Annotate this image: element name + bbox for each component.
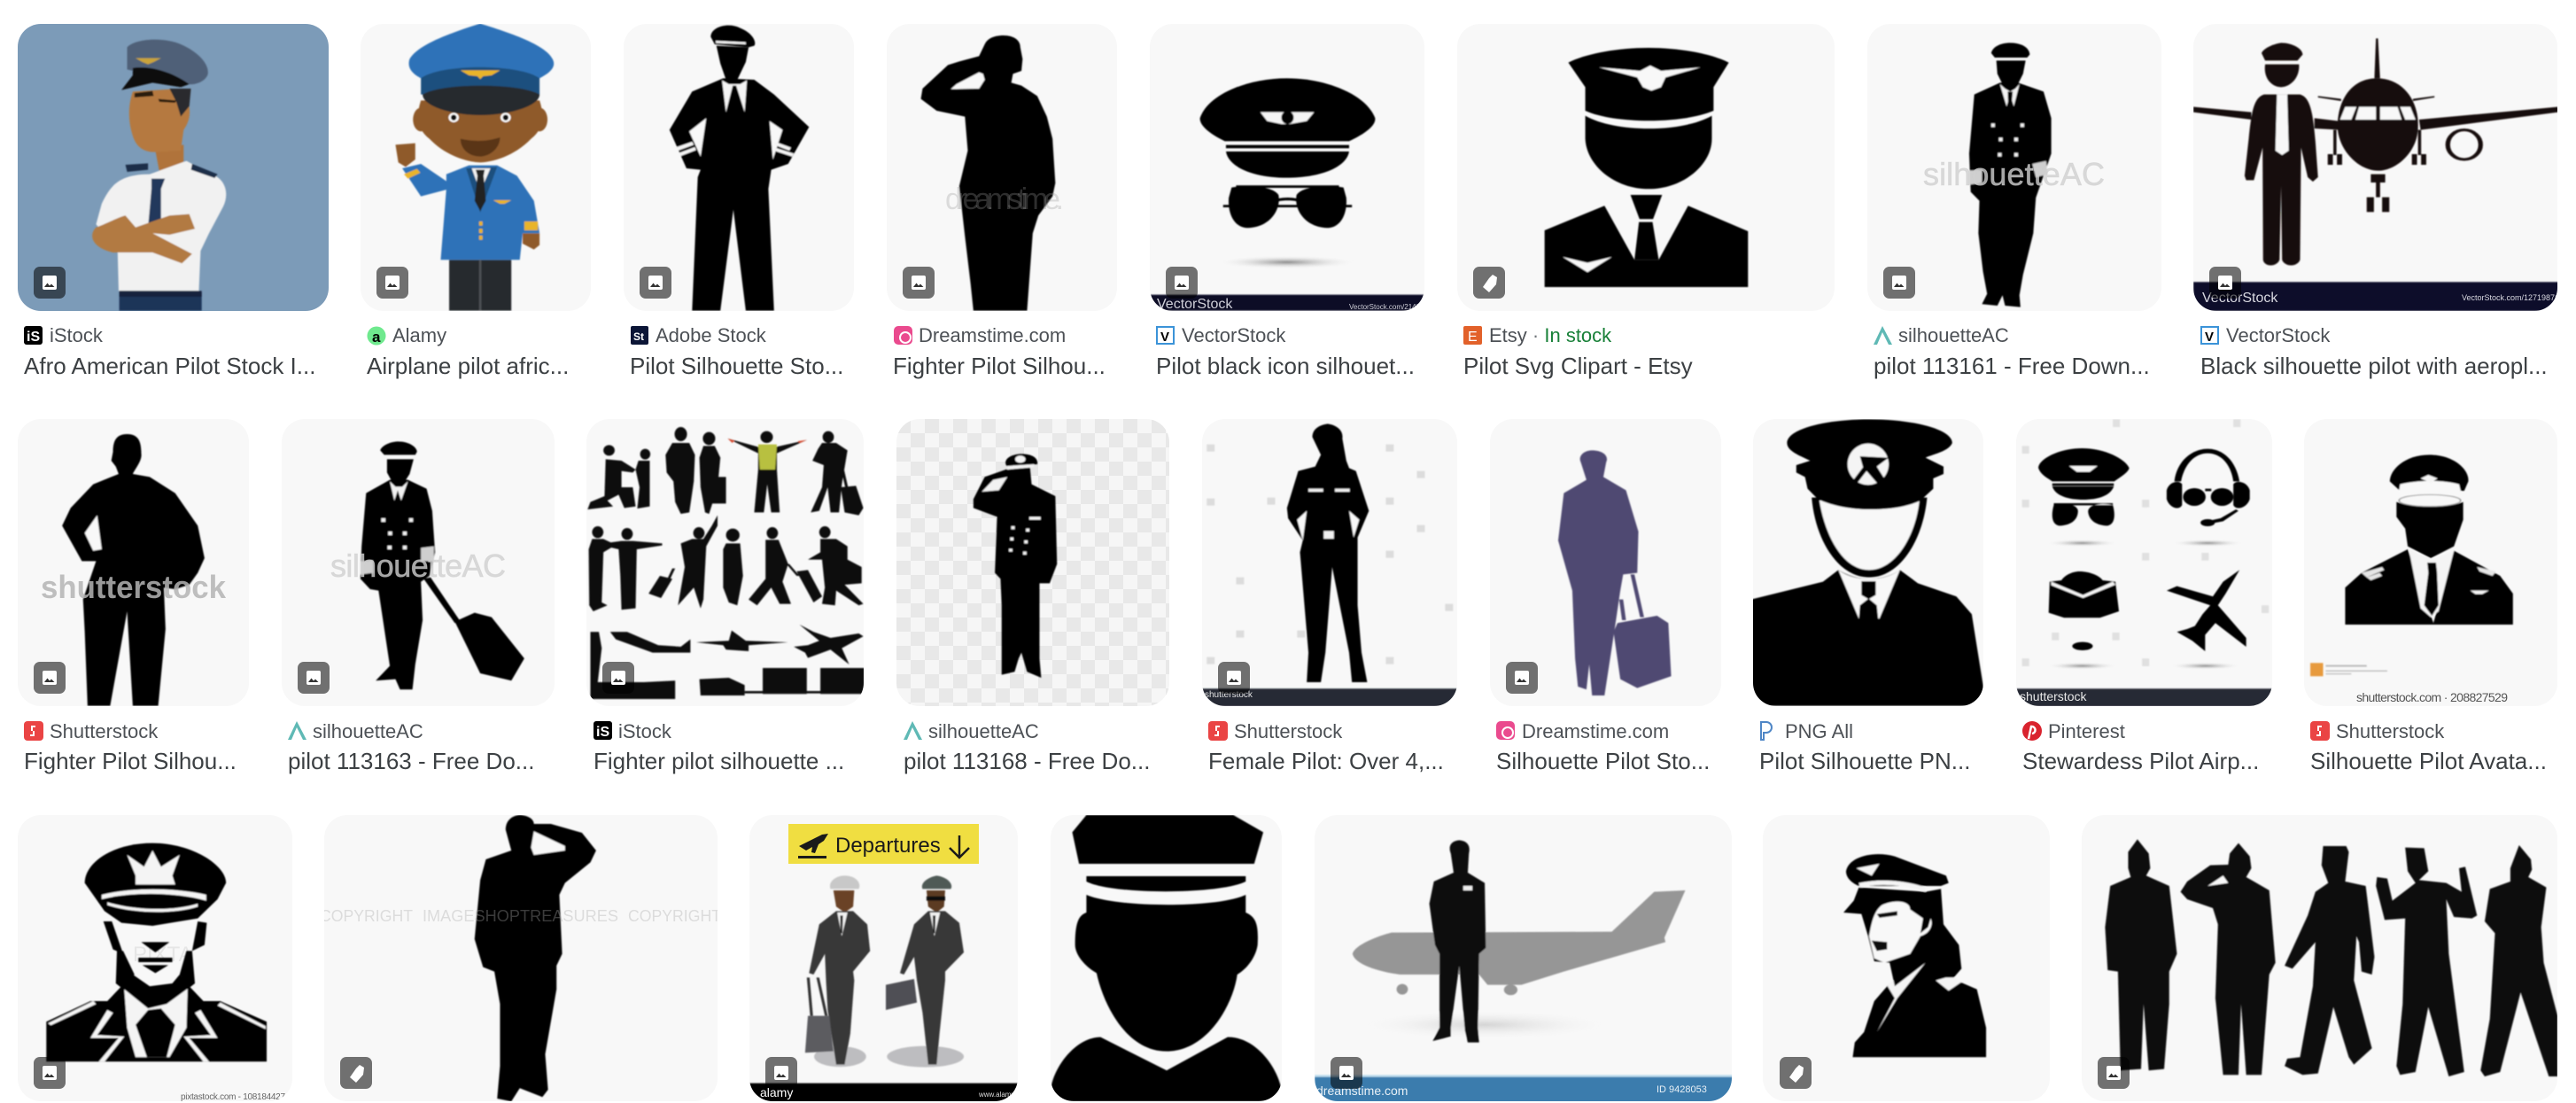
panel: result 13 Shutterstock female pilot: [1202, 419, 1459, 774]
source: Etsy, in stock: E: [1468, 330, 1478, 345]
panel: result 11 iStock silhouettes set: [586, 419, 865, 774]
watermark: silhouetteAC: [330, 548, 506, 584]
thumbnail: captain with rolling suitcase: [298, 439, 526, 694]
panel: result 15 PNG All: [1751, 419, 1983, 774]
badge: image: [602, 662, 634, 685]
badge: image: [1166, 267, 1198, 299]
panel: result 18 Pixta officer illustration: [18, 815, 292, 1102]
watermark bar text: VectorStock: [2202, 291, 2278, 306]
title: pilot 113161 - Free Down...: [1874, 353, 2150, 379]
watermark bar text: [760, 1085, 1030, 1099]
source: silhouetteAC: silhouetteAC: [313, 720, 423, 742]
left pilot with roller bag: [805, 875, 870, 1067]
panel: result 5 VectorStock cap and sunglasses: [1151, 76, 1424, 374]
panel: result 4 Dreamstime: [894, 34, 1104, 379]
source: silhouetteAC: silhouetteAC: [928, 720, 1039, 742]
source: Alamy: a: [372, 329, 381, 346]
watermark bar text: www.alamy.com: [978, 1091, 1030, 1099]
thumbnail: saluting pilot silhouette: [903, 34, 1061, 311]
panel: result 9 Shutterstock fighter pilot: [24, 432, 234, 774]
source: Shutterstock: Shutterstock: [50, 720, 159, 742]
badge: image: [34, 662, 66, 694]
panel: result 2 Alamy: [367, 24, 567, 379]
watermark bar text: shutterstock: [2020, 689, 2087, 703]
badge: image: [34, 1057, 66, 1089]
title: Pilot Silhouette Sto...: [630, 353, 843, 379]
source: VectorStock: V: [1160, 330, 1169, 345]
source: Dreamstime: Dreamstime.com: [919, 324, 1066, 346]
watermark id: pixtastock.com - 108184427: [181, 1092, 285, 1102]
badge: image: [376, 267, 408, 299]
icon: pilot bust: [1051, 815, 1281, 1101]
watermark bar text: VectorStock.com/21481509: [1349, 303, 1436, 311]
watermark: shutterstock: [41, 569, 227, 605]
source: Pinterest: Pinterest: [2048, 720, 2125, 742]
watermark bar text: [1316, 1084, 1707, 1098]
badge: image: [1331, 1057, 1362, 1089]
watermark bar text: alamy: [760, 1085, 793, 1099]
title: Airplane pilot afric...: [367, 353, 569, 379]
title: Fighter Pilot Silhou...: [24, 748, 237, 774]
thumbnail: pilot avatar bust: [2304, 419, 2557, 706]
thumbnail: pilot with aeroplane front view: [2193, 24, 2559, 311]
source: VectorStock: VectorStock: [1182, 324, 1286, 346]
watermark: COPYRIGHT: [628, 907, 721, 925]
right pilot with briefcase: [739, 875, 1021, 1102]
departures sign: Departures: [835, 834, 941, 858]
badge: image: [298, 662, 330, 694]
watermark: [320, 907, 721, 925]
source: Etsy, in stock: Etsy · In stock: [1489, 324, 1612, 346]
departures sign: [788, 824, 979, 864]
source: Shutterstock: Shutterstock: [2336, 720, 2445, 742]
watermark: PIXTA: [133, 943, 193, 967]
panel: result 23 female pilot portrait: [1763, 815, 2050, 1101]
title: Silhouette Pilot Sto...: [1496, 748, 1710, 774]
thumbnail: standing captain silhouette: [1883, 41, 2105, 308]
silhouette: saluting person: [475, 815, 596, 1101]
thumbnail: pilot silhouette hands on hips: [640, 24, 810, 311]
badge: tag: [340, 1057, 372, 1089]
title: pilot 113163 - Free Do...: [288, 748, 534, 774]
badge: image: [2098, 1057, 2130, 1089]
thumbnail: pilot cap and aviator sunglasses icon: [1151, 76, 1424, 311]
title: Pilot Silhouette PN...: [1759, 748, 1970, 774]
source: Adobe Stock: St: [633, 330, 644, 343]
panel: result 14 Dreamstime pilot with luggage: [1490, 419, 1721, 774]
panel: result 21 pilot head and shoulders icon: [1051, 815, 1282, 1101]
title: pilot 113168 - Free Do...: [904, 748, 1150, 774]
badge: image: [1218, 662, 1250, 694]
watermark: COPYRIGHT: [320, 907, 413, 925]
thumbnail: pilot avatar with globe emblem cap: [1751, 419, 1983, 706]
panel: result 8 VectorStock pilot and aeroplane: [2193, 24, 2559, 379]
source: Adobe Stock: Adobe Stock: [656, 324, 767, 346]
panel: result 12 silhouetteAC saluting on checkerboard: [896, 419, 1169, 774]
watermark bar text: ID 9428053: [1657, 1084, 1707, 1095]
watermark: IMAGESHOPTREASURES: [423, 907, 618, 925]
title: Silhouette Pilot Avata...: [2310, 748, 2547, 774]
title: Pilot Svg Clipart - Etsy: [1463, 353, 1693, 379]
watermark bar text: [2202, 292, 2557, 302]
source: iStock: [24, 324, 104, 346]
panel: result 10 silhouetteAC pilot with suitcase: [288, 439, 533, 774]
watermark bar text: dreamstime.com: [1316, 1084, 1408, 1098]
thumbnail: saluting officer on transparent checker: [896, 419, 1169, 706]
thumbnail: purple silhouette pilot with luggage: [1490, 419, 1721, 706]
panel: result 7 silhouetteAC: [1874, 41, 2147, 379]
thumbnail: collection of airport staff and plane silhouettes: [586, 419, 865, 706]
source: silhouetteAC: silhouetteAC: [1898, 324, 2009, 346]
thumbnail: pilot avatar with cap and suit: [1473, 46, 1750, 299]
title: Pilot black icon silhouet...: [1156, 353, 1415, 379]
thumbnail: cartoon pilot with crossed arms: [18, 24, 329, 311]
source: Shutterstock: Shutterstock: [1234, 720, 1343, 742]
watermark: dreamstime.: [945, 183, 1064, 216]
source: iStock: iStock: [50, 324, 104, 346]
title: Stewardess Pilot Airp...: [2022, 748, 2259, 774]
badge: image: [765, 1057, 797, 1089]
source: Alamy: [367, 324, 446, 346]
watermark id text: shutterstock.com · 208827529: [2356, 690, 2508, 704]
illustration: female pilot in cap: [1843, 854, 1986, 1057]
badge: tag: [1473, 267, 1505, 299]
illustration: pilot standing before grey plane: [1315, 840, 1733, 1102]
badge: image: [640, 267, 671, 299]
badge: image: [1506, 662, 1538, 694]
title: Fighter pilot silhouette ...: [594, 748, 844, 774]
source: iStock: iS: [596, 725, 609, 740]
watermark: silhouetteAC: [1923, 156, 2105, 192]
panel: result 3 Adobe Stock: [624, 24, 854, 379]
panel: result 6 Etsy: [1463, 46, 1750, 379]
panel: result 17 Shutterstock avatar: [2304, 419, 2557, 774]
source: iStock: [594, 720, 672, 742]
badge: tag: [1780, 1057, 1812, 1089]
thumbnail: female pilot standing: [1202, 419, 1459, 706]
thumbnail: four aviation icons: [2016, 419, 2273, 706]
source: iStock: iS: [27, 330, 40, 345]
panel: result 20 Alamy departures: [739, 815, 1030, 1102]
source: Dreamstime: Dreamstime.com: [1522, 720, 1669, 742]
watermark bar text: VectorStock.com/12719876: [2462, 293, 2559, 302]
source: iStock: iStock: [618, 720, 672, 742]
source: VectorStock: V: [2205, 330, 2214, 345]
panel: result 1 iStock: [18, 24, 329, 379]
watermark bar text: VectorStock: [1157, 297, 1233, 312]
source: VectorStock: VectorStock: [2226, 324, 2331, 346]
thumbnail: cartoon pilot in blue uniform waving: [376, 24, 555, 311]
title: Female Pilot: Over 4,...: [1208, 748, 1444, 774]
source: Alamy: Alamy: [392, 324, 446, 346]
title: Fighter Pilot Silhou...: [893, 353, 1106, 379]
watermark bar text: shutterstock: [1205, 690, 1253, 700]
badge: image: [2209, 267, 2241, 299]
illustration: five figures in caps: [2105, 839, 2557, 1076]
title: Afro American Pilot Stock I...: [24, 353, 315, 379]
panel: result 22 Dreamstime pilot with plane: [1315, 815, 1733, 1102]
panel: result 19 saluting silhouette with copyright watermark: [320, 815, 721, 1101]
watermark bar text: [1157, 298, 1417, 309]
source: PNG All: PNG All: [1785, 720, 1853, 742]
panel: result 16 Pinterest stewardess and pilot icons: [2016, 419, 2273, 774]
badge: image: [34, 267, 66, 299]
title: Black silhouette pilot with aeropl...: [2200, 353, 2548, 379]
thumbnail: fighter pilot holding helmet: [34, 432, 226, 706]
badge: image: [1883, 267, 1915, 299]
panel: result 24 group of five silhouettes: [2082, 815, 2557, 1101]
badge: image: [903, 267, 935, 299]
illustration: officer bust in peaked cap: [46, 843, 267, 1061]
